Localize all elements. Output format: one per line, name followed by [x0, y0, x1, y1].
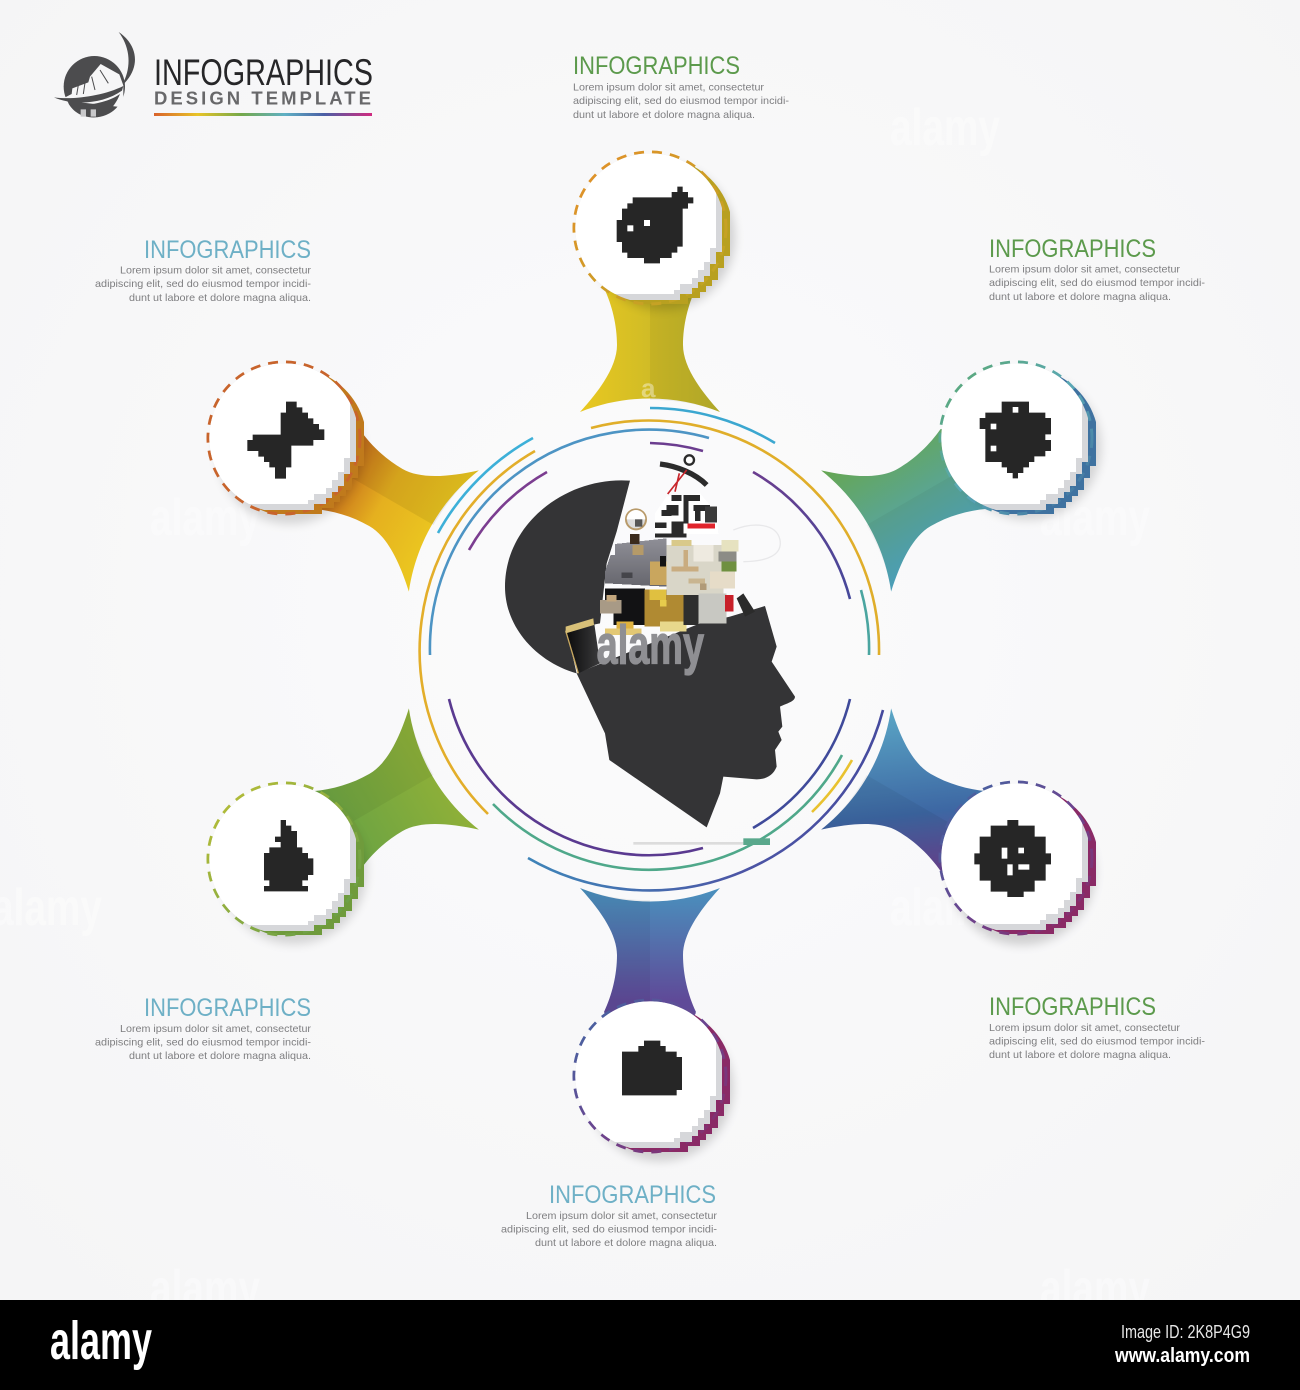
- text block: lower right: dunt ut labore et dolore magna aliqua.: [989, 1049, 1171, 1061]
- icon: gear: [974, 820, 1051, 897]
- text block: upper right: adipiscing elit, sed do eiusmod tempor incidi-: [989, 277, 1206, 289]
- text block: top: Lorem ipsum dolor sit amet, consectetur: [573, 82, 765, 94]
- hub: lower left with drop icon: [208, 783, 367, 944]
- text block: lower left: [95, 994, 312, 1062]
- text block: upper left: dunt ut labore et dolore magna aliqua.: [129, 292, 311, 304]
- icon: logo globe and crescent: [54, 32, 135, 117]
- text block: lower right: Lorem ipsum dolor sit amet, consectetur: [989, 1022, 1181, 1034]
- rainbow underline: [154, 113, 372, 116]
- text block: upper left: [95, 236, 312, 304]
- image id: Image ID: 2K8P4G9: [1121, 1322, 1250, 1342]
- text block: bottom: INFOGRAPHICS: [549, 1181, 716, 1209]
- text block: lower left: adipiscing elit, sed do eiusmod tempor incidi-: [95, 1036, 312, 1048]
- faint stock watermarks: alamy: [150, 1260, 260, 1318]
- text block: lower left: Lorem ipsum dolor sit amet, consectetur: [120, 1023, 312, 1035]
- logo subtitle: DESIGN TEMPLATE: [154, 88, 371, 108]
- text block: upper left: INFOGRAPHICS: [144, 236, 311, 264]
- text block: lower right: [989, 993, 1206, 1061]
- text block: bottom: Lorem ipsum dolor sit amet, consectetur: [526, 1210, 718, 1222]
- head lower silhouette: [577, 606, 795, 827]
- text block: lower left: dunt ut labore et dolore magna aliqua.: [129, 1050, 311, 1062]
- hub: top with bomb icon: [574, 152, 735, 310]
- spectacles: [733, 525, 780, 562]
- text block: upper left: adipiscing elit, sed do eiusmod tempor incidi-: [95, 278, 312, 290]
- ground artefact: [633, 838, 770, 845]
- text block: lower left: INFOGRAPHICS: [144, 994, 311, 1022]
- connector: upper left: [276, 393, 479, 592]
- central head illustration: [505, 455, 795, 845]
- tablet: [566, 618, 600, 673]
- text block: upper right: INFOGRAPHICS: [989, 235, 1156, 263]
- text block: bottom: [501, 1181, 718, 1249]
- connector: bottom: [580, 888, 720, 1042]
- hub: bottom with briefcase icon: [574, 1000, 733, 1161]
- faint stock watermarks: alamy: [1040, 1260, 1150, 1318]
- faint stock watermarks: alamy: [150, 489, 260, 547]
- text block: top: dunt ut labore et dolore magna aliqua.: [573, 109, 755, 121]
- faint stock watermarks: alamy: [890, 99, 1000, 157]
- icon: bow tie: [247, 402, 324, 479]
- icon: flame drop: [264, 820, 313, 891]
- hub: upper left with bow-tie icon: [208, 362, 364, 524]
- text block: top: adipiscing elit, sed do eiusmod tempor incidi-: [573, 95, 790, 107]
- watermark letter on top connector: a: [641, 373, 656, 403]
- connector: upper right: [821, 393, 1024, 592]
- text block: upper right: dunt ut labore et dolore magna aliqua.: [989, 291, 1171, 303]
- faint stock watermarks: [0, 99, 1150, 1318]
- magnifier ring: [626, 509, 646, 529]
- hub: upper right with leaf icon: [940, 362, 1101, 520]
- text block: upper right: Lorem ipsum dolor sit amet, consectetur: [989, 264, 1181, 276]
- text block: lower right: INFOGRAPHICS: [989, 993, 1156, 1021]
- pen: [737, 593, 755, 617]
- collage of objects rising from the head: [600, 493, 738, 635]
- concentric ring arcs: [420, 408, 883, 890]
- image watermark: alamy: [597, 613, 704, 675]
- connector: lower left: [276, 708, 479, 907]
- logo: infographics design template: [54, 32, 373, 117]
- opened skull lid: [505, 480, 630, 673]
- text block: lower right: adipiscing elit, sed do eiusmod tempor incidi-: [989, 1036, 1206, 1048]
- faint stock watermarks: alamy: [1040, 489, 1150, 547]
- text block: top: INFOGRAPHICS: [573, 52, 740, 80]
- website: www.alamy.com: [1114, 1345, 1250, 1367]
- text block: top: [573, 52, 790, 121]
- logo title: INFOGRAPHICS: [154, 52, 373, 93]
- footer brand: alamy: [50, 1311, 152, 1371]
- icon: leaf blob: [980, 402, 1051, 478]
- text block: bottom: dunt ut labore et dolore magna aliqua.: [535, 1237, 717, 1249]
- faint stock watermarks: alamy: [890, 879, 1000, 937]
- footer bar: [0, 1300, 1300, 1390]
- icon: case: [622, 1041, 682, 1095]
- connector: lower right: [821, 708, 1024, 907]
- connector: top: [580, 258, 720, 412]
- text block: bottom: adipiscing elit, sed do eiusmod tempor incidi-: [501, 1224, 718, 1236]
- text block: upper right: [989, 235, 1206, 303]
- text block: upper left: Lorem ipsum dolor sit amet, consectetur: [120, 264, 312, 276]
- icon: bomb: [617, 187, 693, 263]
- pickaxe: [660, 455, 707, 494]
- hub: lower right with gear icon: [940, 782, 1096, 945]
